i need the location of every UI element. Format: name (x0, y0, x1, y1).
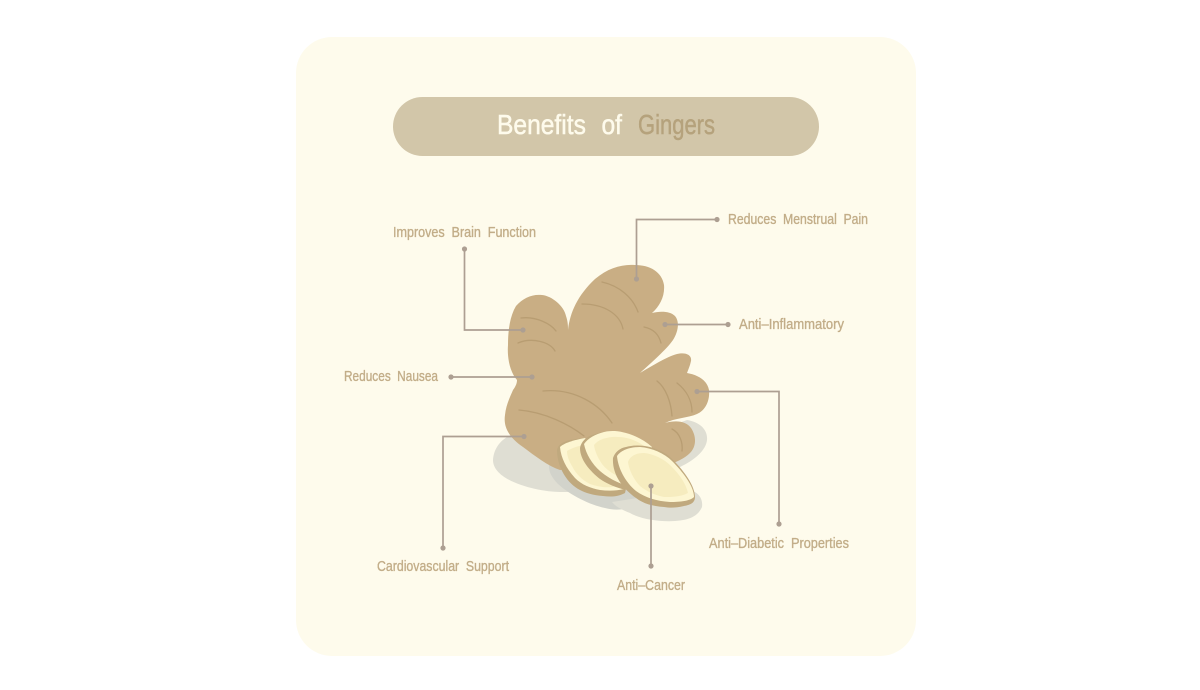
ginger body (505, 265, 709, 470)
callout: Anti-Cancer (617, 483, 685, 594)
callout: Reduces Menstrual Pain (634, 211, 868, 282)
callout: Cardiovascular Support (377, 434, 527, 575)
ginger slice: front (613, 446, 695, 508)
callout: Improves Brain Function (393, 224, 536, 333)
callout: Anti-Inflammatory: Anti–Inflammatory (739, 316, 844, 333)
title: Gingers: Gingers (638, 109, 715, 140)
callout: Improves Brain Function: Improves Brain Function (393, 224, 536, 241)
callout: Anti-Cancer: Anti–Cancer (617, 577, 685, 594)
ginger skin creases (518, 282, 692, 451)
illustration: ginger root with slices (493, 265, 709, 521)
callout: Anti-Diabetic Properties (694, 389, 849, 552)
title banner (393, 97, 819, 156)
panel: background card (296, 37, 916, 656)
ground shadows (493, 420, 707, 521)
title: Benefits of: Benefits of (497, 109, 622, 140)
ginger slice: middle (580, 431, 652, 490)
callout: Reduces Menstrual Pain: Reduces Menstrual Pain (728, 211, 868, 228)
callout: Reduces Nausea (344, 368, 535, 385)
ginger slice: back (557, 438, 628, 497)
callout: Reduces Nausea: Reduces Nausea (344, 368, 439, 385)
callout: Anti-Inflammatory (662, 316, 844, 333)
callout: Anti-Diabetic Properties: Anti–Diabetic Properties (709, 535, 849, 552)
callout: Cardiovascular Support: Cardiovascular Support (377, 558, 510, 575)
